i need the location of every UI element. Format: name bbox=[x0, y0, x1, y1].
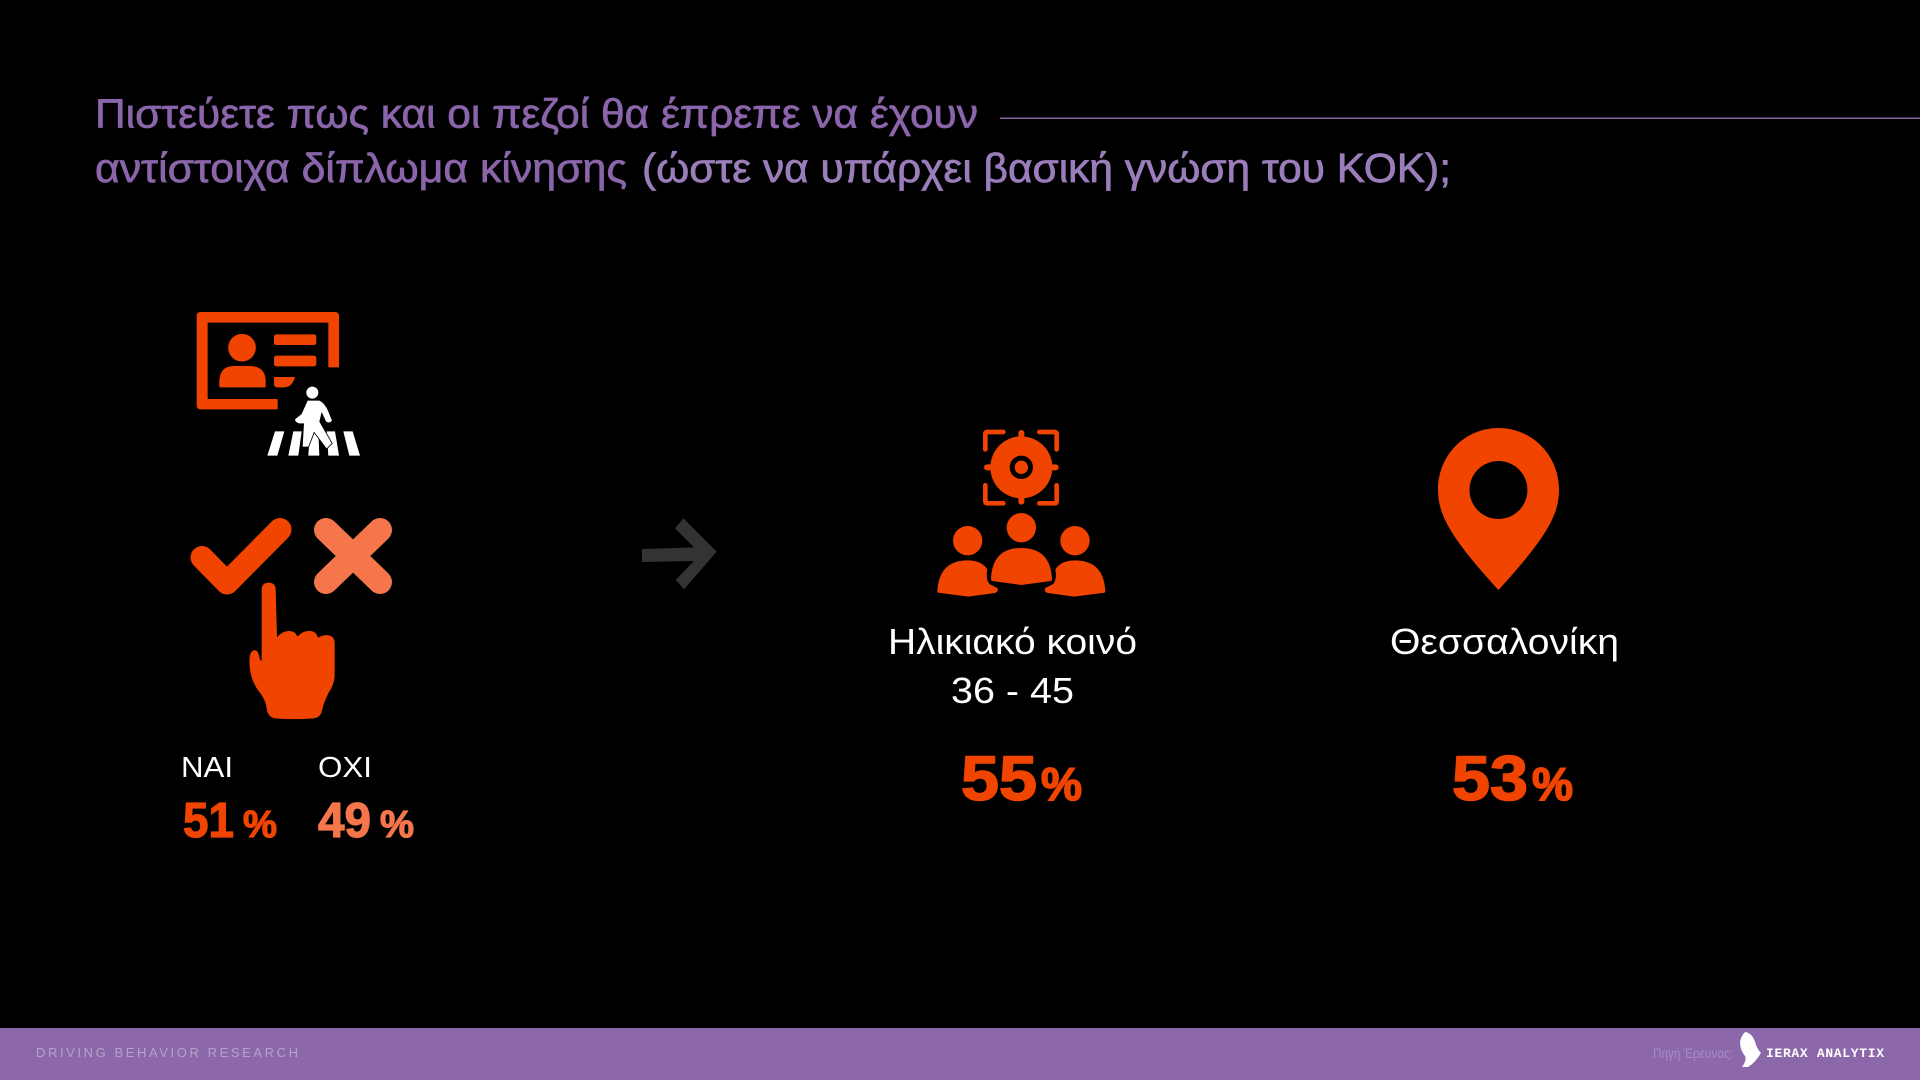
icon: location pin bbox=[1438, 428, 1559, 590]
value: yes 51%: 51 bbox=[183, 794, 234, 848]
icon: target audience bbox=[937, 430, 1105, 597]
footer: research label: DRIVING BEHAVIOR RESEARCH bbox=[36, 1045, 298, 1060]
value: no 49%: 49 bbox=[318, 794, 371, 848]
value: no 49% bbox=[318, 794, 414, 848]
value: age group 55%: % bbox=[1041, 758, 1082, 810]
footer bar bbox=[0, 1028, 1920, 1080]
value: yes 51% bbox=[183, 794, 277, 848]
label: no: ΟΧΙ bbox=[318, 752, 372, 784]
title: αντίστοιχα δίπλωμα κίνησης bbox=[95, 145, 627, 191]
arrow bbox=[642, 518, 717, 589]
value: city 53%: 53 bbox=[1452, 744, 1528, 814]
title: (ώστε να υπάρχει βασική γνώση του ΚΟΚ); bbox=[642, 145, 1451, 191]
icon: check mark bbox=[202, 530, 280, 583]
icon: id card with pedestrian crossing bbox=[197, 312, 360, 456]
value: age group 55% bbox=[961, 744, 1082, 814]
icon: pointing hand bbox=[249, 583, 335, 719]
value: age group 55%: 55 bbox=[961, 744, 1037, 814]
title bbox=[95, 90, 1451, 191]
value: no 49%: % bbox=[380, 804, 414, 846]
title: Πιστεύετε πως και οι πεζοί θα έπρεπε να έχουν bbox=[95, 90, 978, 136]
icon: hawk logo bbox=[1740, 1032, 1761, 1067]
value: city 53%: % bbox=[1532, 758, 1573, 810]
icon: cross mark bbox=[326, 530, 380, 582]
text: city: Θεσσαλονίκη bbox=[1390, 621, 1619, 662]
footer: company name: IERAX ANALYTIX bbox=[1766, 1046, 1884, 1061]
text: age group: Ηλικιακό κοινό bbox=[888, 621, 1137, 662]
footer: source label: Πηγή Έρευνας: bbox=[1653, 1045, 1733, 1061]
text: age group bbox=[888, 621, 1137, 711]
value: city 53% bbox=[1452, 744, 1573, 814]
text: age group: 36 - 45 bbox=[951, 670, 1074, 711]
label: yes: ΝΑΙ bbox=[181, 752, 233, 784]
value: yes 51%: % bbox=[243, 804, 277, 846]
